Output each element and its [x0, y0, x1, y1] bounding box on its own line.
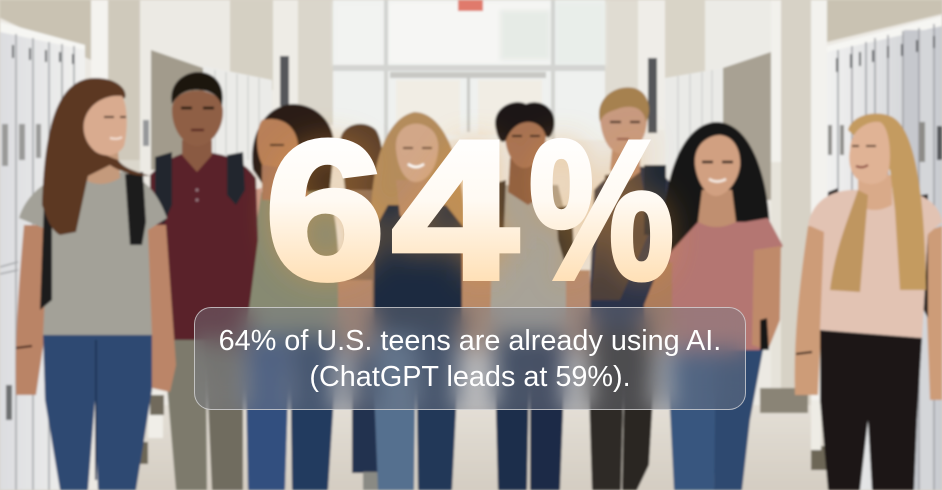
student 4: blonde girl in navy top — [371, 112, 492, 490]
student 6: boy with blond hair — [587, 87, 677, 490]
student 8: blonde girl in pink tee — [795, 114, 942, 490]
window and doors at end of hall — [333, 0, 605, 140]
left side lockers — [0, 22, 85, 490]
student 5: girl with dark hair buns — [490, 102, 590, 490]
big number glow: 6 — [265, 100, 385, 320]
big number glow: 4 — [392, 100, 518, 320]
big number 64% — [265, 100, 674, 320]
background girl behind group — [340, 124, 383, 490]
big number glow: % — [529, 100, 674, 320]
big number glow — [265, 100, 674, 320]
callout line two: (ChatGPT leads at 59%). — [309, 360, 631, 392]
far right lockers and door panel — [665, 52, 781, 402]
callout: frosted text card — [194, 307, 746, 410]
right side lockers — [827, 16, 942, 490]
callout line one: 64% of U.S. teens are already using AI. — [219, 324, 721, 356]
student 1: girl with long brown hair — [16, 78, 176, 490]
student 7: girl in pink top — [644, 122, 783, 490]
big number 64%: % — [529, 100, 674, 320]
student 2: boy in maroon shirt — [150, 72, 258, 490]
student 3: girl with curly hair — [218, 104, 372, 490]
far left lockers and door panel — [143, 50, 272, 170]
floor and baseboards — [60, 388, 835, 490]
big number 64%: 6 — [265, 100, 385, 320]
big number 64%: 4 — [392, 100, 518, 320]
